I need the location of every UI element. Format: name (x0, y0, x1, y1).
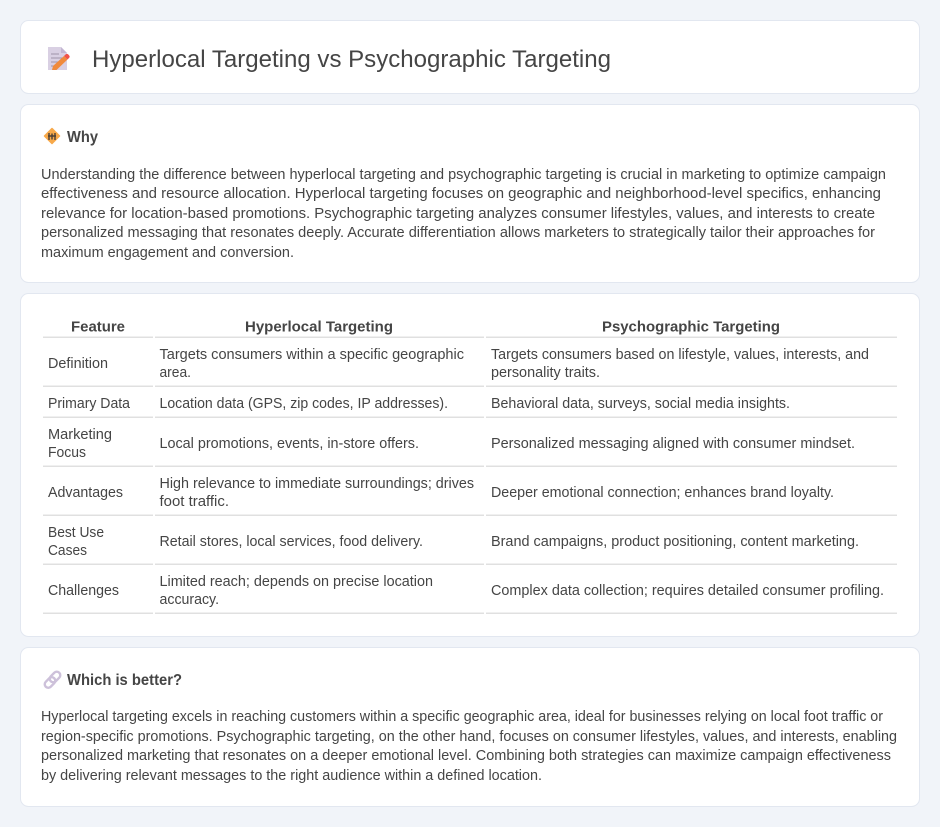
table header row: Feature (71, 318, 125, 336)
panel: which is better (20, 648, 920, 806)
row: definition: area. (160, 365, 191, 381)
row: primary data: Primary Data (48, 396, 130, 412)
text block: which is better paragraph: Hyperlocal targeting excels in reaching customers within a specific geographic area, ideal for businesses relying on local foot traffic or (41, 709, 883, 725)
heading: why: Why (67, 129, 98, 146)
text block: which is better paragraph: by delivering relevant messages to the right audience within a defined location. (41, 768, 542, 784)
heading: which is better: Which is better? (67, 672, 182, 689)
row: advantages: foot traffic. (160, 494, 229, 510)
panel: header (20, 20, 920, 94)
row: primary data: Behavioral data, surveys, social media insights. (491, 396, 790, 412)
row: advantages: High relevance to immediate surroundings; drives (160, 476, 474, 492)
table header row: Psychographic Targeting (602, 318, 780, 336)
row: best use cases: Best Use (48, 525, 104, 541)
row: challenges: accuracy. (160, 592, 219, 608)
row: challenges: Complex data collection; requires detailed consumer profiling. (491, 583, 884, 599)
row: primary data: Location data (GPS, zip codes, IP addresses). (160, 396, 448, 412)
text block: which is better paragraph: personalized marketing that resonates on a deeper emotional level. Combining both strategies can maximize campaign effectiveness (41, 748, 891, 764)
row: best use cases: Retail stores, local services, food delivery. (160, 534, 423, 550)
title: Hyperlocal Targeting vs Psychographic Targeting (92, 46, 611, 73)
icon: orange diamond sign (44, 128, 60, 144)
table header row (71, 318, 780, 336)
row: advantages: Advantages (48, 485, 123, 501)
text block: why paragraph: relevance for location-based promotions. Psychographic targeting analyzes consumer lifestyles, values, and interests to create (41, 206, 875, 222)
row: challenges (48, 574, 884, 608)
text block: why paragraph: personalized messaging that resonates deeply. Accurate differentiation allows marketers to strategically tailor their approaches for (41, 225, 875, 241)
row: definition: personality traits. (491, 365, 600, 381)
row: marketing focus: Personalized messaging aligned with consumer mindset. (491, 436, 855, 452)
row: challenges: Limited reach; depends on precise location (160, 574, 433, 590)
text block: which is better paragraph: region-specific promotions. Psychographic targeting, on the other hand, focuses on consumer lifestyles, values, and interests, enabling (41, 729, 897, 745)
row: marketing focus: Marketing (48, 427, 112, 443)
row: primary data (48, 396, 790, 412)
row: challenges: Challenges (48, 583, 119, 599)
text block: why paragraph: effectiveness and resource allocation. Hyperlocal targeting focuses on geographic and neighborhood-level specifics, enhancing (41, 186, 881, 202)
row: best use cases: Brand campaigns, product positioning, content marketing. (491, 534, 859, 550)
row: definition (48, 347, 869, 381)
panel: comparison table (20, 294, 920, 636)
row: advantages: Deeper emotional connection; enhances brand loyalty. (491, 485, 834, 501)
row: marketing focus (48, 427, 855, 461)
icon: document with pencil (48, 47, 70, 70)
icon: chain link (43, 670, 62, 689)
row: definition: Targets consumers based on lifestyle, values, interests, and (491, 347, 869, 363)
text block: why paragraph: maximum engagement and conversion. (41, 245, 294, 261)
text block: why paragraph: Understanding the difference between hyperlocal targeting and psychographic targeting is crucial in marketing to optimize campaign (41, 167, 886, 183)
row: best use cases (48, 525, 859, 559)
row: definition: Targets consumers within a specific geographic (160, 347, 464, 363)
text block: why paragraph (41, 167, 886, 261)
row: best use cases: Cases (48, 543, 87, 559)
text block: which is better paragraph (41, 709, 897, 784)
panel: why (20, 104, 920, 282)
table header row: Hyperlocal Targeting (245, 318, 393, 336)
row: definition: Definition (48, 356, 108, 372)
row: marketing focus: Focus (48, 445, 86, 461)
row: marketing focus: Local promotions, events, in-store offers. (160, 436, 419, 452)
row: advantages (48, 476, 834, 510)
